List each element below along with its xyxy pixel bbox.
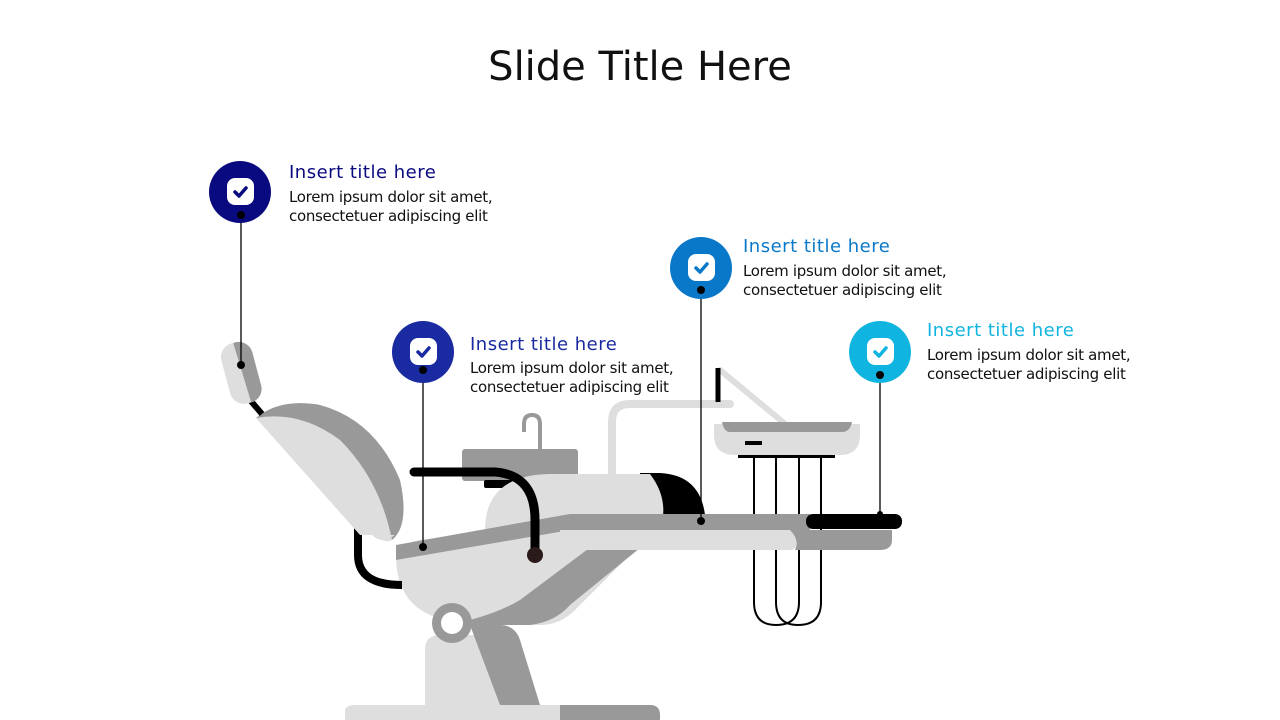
text: Insert title here — [927, 320, 1074, 341]
backrest — [256, 403, 404, 540]
text: consectetuer adipiscing elit — [743, 281, 942, 299]
sink — [462, 449, 578, 481]
callout 3 — [743, 236, 946, 299]
text: Insert title here — [470, 334, 617, 355]
pivot — [432, 603, 472, 643]
headrest — [250, 400, 262, 414]
text: Lorem ipsum dolor sit amet, — [743, 262, 946, 280]
seat top strip — [396, 514, 810, 560]
text: Lorem ipsum dolor sit amet, — [289, 188, 492, 206]
left arm loop — [358, 515, 402, 585]
text: Insert title here — [289, 162, 436, 183]
tray — [714, 424, 860, 455]
title: Slide Title Here — [488, 44, 792, 90]
cylinder — [640, 473, 705, 515]
dental chair — [218, 339, 902, 720]
instrument arm — [720, 370, 790, 428]
pedestal — [425, 635, 500, 705]
text: Lorem ipsum dolor sit amet, — [927, 346, 1130, 364]
callout 1 — [289, 162, 492, 225]
callout icons — [209, 161, 911, 383]
text: consectetuer adipiscing elit — [470, 378, 669, 396]
seat body — [396, 520, 640, 625]
text: Insert title here — [743, 236, 890, 257]
hoses — [754, 458, 821, 625]
callout 4 — [927, 320, 1130, 383]
base — [345, 705, 575, 720]
armrest — [414, 472, 535, 555]
text: consectetuer adipiscing elit — [927, 365, 1126, 383]
text: consectetuer adipiscing elit — [289, 207, 488, 225]
light pipe — [612, 404, 730, 512]
callout 2 — [470, 334, 673, 396]
text: Lorem ipsum dolor sit amet, — [470, 359, 673, 377]
connector lines — [241, 215, 880, 547]
